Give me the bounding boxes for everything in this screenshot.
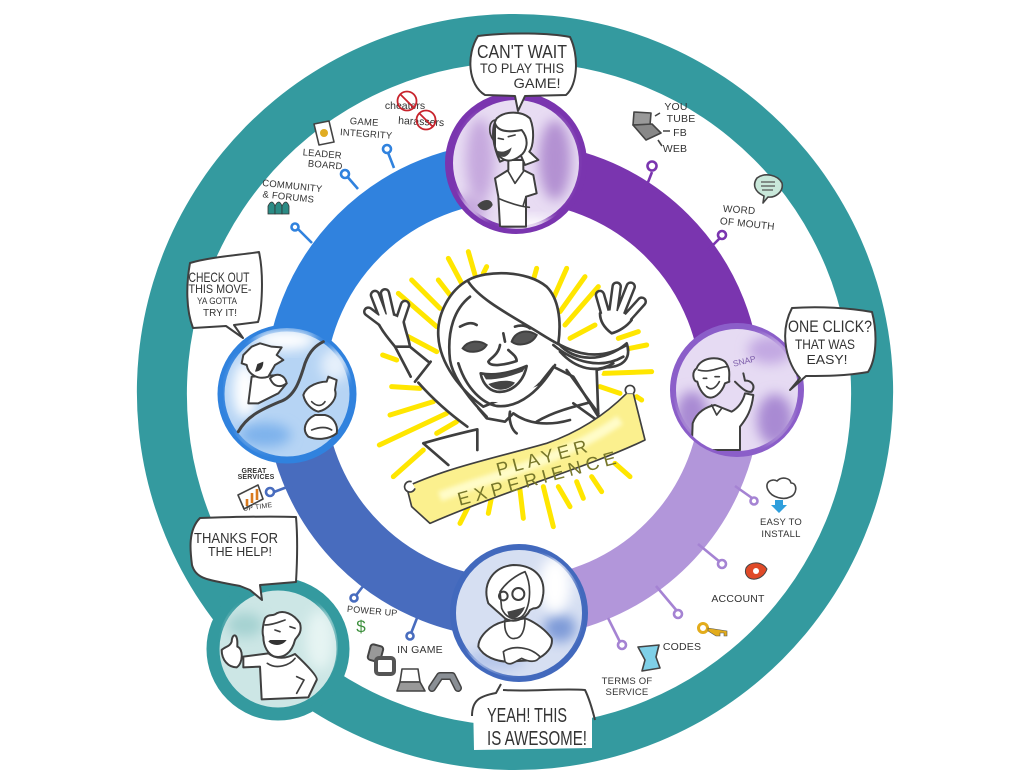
bubble: yeah: IS AWESOME! [487,728,587,750]
sunburst rays [379,252,652,527]
customer support: teal circle [213,584,343,714]
label: codes: CODES [663,641,701,653]
bubble: check out [187,252,262,338]
bubble: thanks: THANKS FOR [194,530,278,547]
bubble: thanks [190,517,297,600]
bubble: one click: ONE CLICK? [788,317,872,336]
bubble: can't wait: CAN'T WAIT [477,42,567,62]
face [457,302,553,402]
label: game integrity: GAME [349,116,379,129]
hair strands and jaw [449,282,627,417]
label: in game [367,644,458,691]
bubble: can't wait [470,33,576,111]
bubble: one click [785,307,875,390]
label: great services up time: UP TIME [243,502,273,513]
label: terms of service [602,645,660,698]
label: word of mouth [719,175,782,233]
banner [405,385,645,523]
bubble: can't wait: TO PLAY THIS [480,60,564,76]
inner journey ring [295,172,731,608]
label: terms of service: TERMS OF [602,676,652,687]
label: community and forums: COMMUNITY [262,178,323,195]
bubble: one click: THAT WAS [795,336,855,352]
snap label: SNAP [732,353,757,369]
label: word of mouth: OF MOUTH [719,216,775,233]
bubble: yeah: YEAH! THIS [487,705,567,727]
label: word of mouth: WORD [723,204,756,217]
label: no cheaters, no harassers: harassers [398,115,444,129]
label: game integrity [340,116,393,142]
persona bottom: blue circle [453,547,585,679]
label: easy to install [760,478,802,540]
bubble: check out: TRY IT! [203,308,237,319]
label: codes [663,624,727,653]
personas [213,96,801,714]
hair [438,273,628,417]
label: media channels: TUBE [667,113,695,125]
label: media channels [633,101,695,155]
right hand [600,287,642,333]
bubble: one click: EASY! [806,352,848,367]
left hand [368,293,410,347]
label: account: ACCOUNT [711,593,765,605]
banner text: PLAYER [494,435,589,480]
label: game integrity: INTEGRITY [340,127,393,142]
banner: EXPERIENCE [455,447,618,510]
bubble: thanks: THE HELP! [208,545,272,559]
label: power up: POWER UP [347,604,398,618]
bubble: check out: CHECK OUT [188,269,250,285]
label: leaderboard [302,121,343,173]
mouth [481,366,527,392]
central player illustration [368,252,652,527]
bubble: check out: THIS MOVE- [188,282,252,296]
eyes and nose [463,332,537,365]
bubble: can't wait: GAME! [514,75,560,91]
body and arms [395,340,603,467]
label: easy to install: EASY TO [760,517,802,528]
label: account [711,563,767,605]
label: community and forums: & FORUMS [262,189,315,206]
label: no cheaters, no harassers [385,92,444,130]
label: leaderboard: LEADER [302,147,342,162]
persona right: lavender circle [673,326,801,454]
label: great services up time [238,468,275,513]
label: media channels: WEB [663,143,687,155]
persona top: purple circle [449,96,583,234]
label: easy to install: INSTALL [761,529,801,540]
label: power up [347,604,398,636]
bubble: check out: YA GOTTA [197,296,237,306]
label: media channels: FB [673,127,687,139]
persona left: blue circle [221,328,353,460]
label: community and forums [262,178,323,214]
bubble: yeah [472,684,595,750]
label: leaderboard: BOARD [307,159,343,173]
label: no cheaters, no harassers: cheaters [385,100,425,112]
pins on ring [266,145,758,649]
label: great services up time: GREAT [242,468,267,475]
label: terms of service: SERVICE [606,687,648,698]
label: in game: IN GAME [397,644,443,656]
label: media channels: YOU [664,101,688,113]
label: great services up time: SERVICES [238,474,275,481]
label: power up: $ [356,617,366,636]
outer teal ring [137,14,893,770]
